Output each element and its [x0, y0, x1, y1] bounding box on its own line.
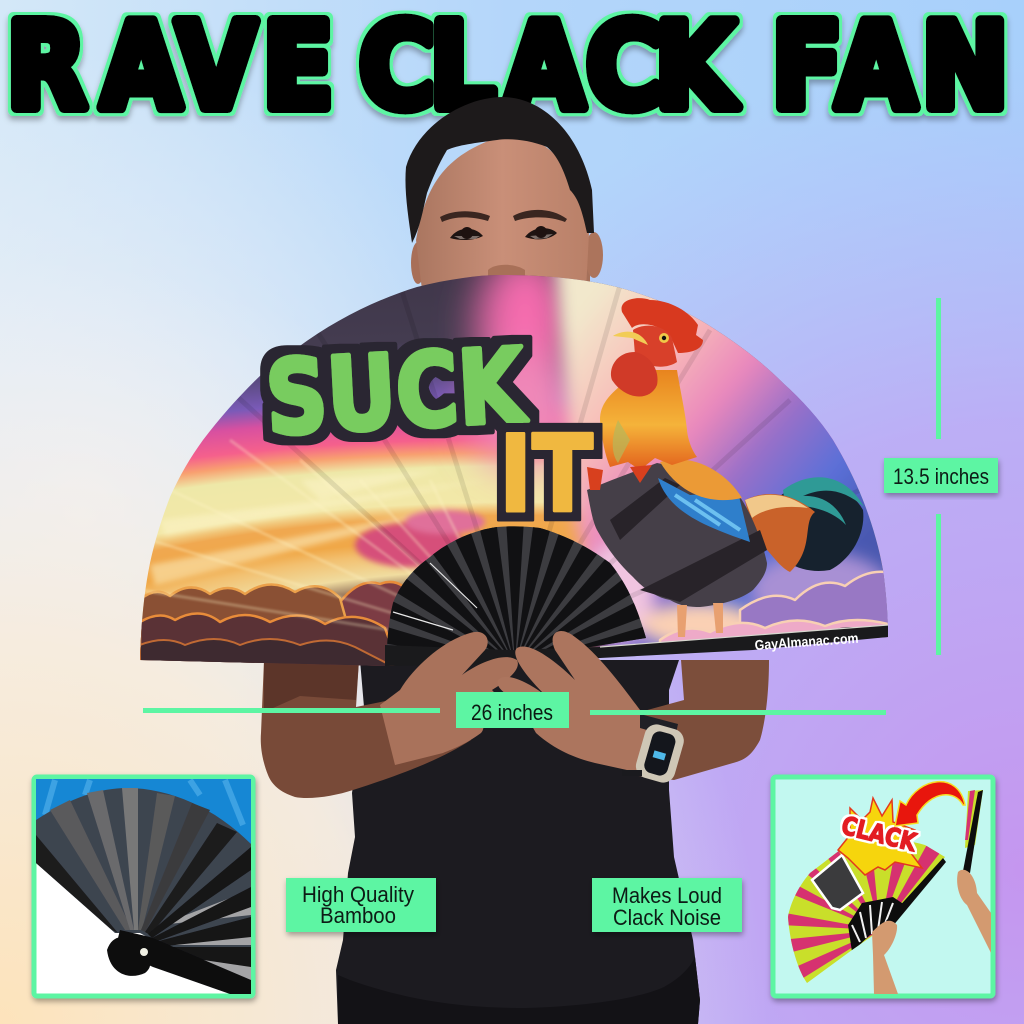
fan guard sticks: [385, 625, 888, 666]
tail dark feathers: [760, 482, 863, 571]
callout: high quality bamboo: Bamboo: [320, 903, 396, 928]
left hand: [380, 632, 518, 765]
sky tint under rooster: [585, 540, 890, 647]
callout: makes loud clack noise: Clack Noise: [613, 905, 721, 930]
height label: 13.5 inches: [893, 464, 989, 489]
head: [633, 326, 677, 367]
upper arm and hand: [957, 870, 991, 953]
face: [416, 135, 589, 290]
eye whites: [454, 234, 553, 239]
handle: [115, 930, 251, 994]
blue fabric: [36, 779, 251, 844]
red arrow: [895, 782, 965, 826]
clack word: CLACK: [839, 811, 921, 858]
bamboo: [848, 897, 905, 952]
fan website text: GayAlmanac.com: [754, 630, 859, 653]
width label: 26 inches: [471, 700, 553, 725]
striped fan: [788, 842, 945, 983]
red neck feathers: [587, 465, 652, 490]
right half sky: [544, 276, 888, 648]
hair: [405, 97, 594, 243]
body: [587, 463, 767, 607]
title: CLACK: [359, 0, 739, 136]
lower arm and hand: [872, 921, 898, 994]
smart watch: [622, 714, 687, 785]
bamboo ribs: [387, 526, 646, 650]
callout: makes loud clack noise: Makes Loud: [612, 883, 722, 908]
ears: [411, 242, 425, 284]
fan fabric print: [140, 275, 888, 666]
eyes: [450, 228, 557, 240]
width label: [456, 692, 569, 728]
hackle shadow: [613, 420, 630, 463]
person: [261, 97, 769, 1024]
hackle neck: [600, 370, 697, 470]
clouds right: [658, 570, 888, 642]
panel: clack demonstration: [773, 777, 993, 996]
bamboo ribs: [36, 788, 251, 967]
width dimension: [143, 692, 886, 728]
beak: [613, 332, 648, 345]
fan stick: [886, 858, 946, 927]
closed fan: [965, 790, 983, 848]
title: FAN: [772, 0, 1009, 136]
left arm: [261, 660, 471, 798]
rooster: [587, 298, 864, 637]
nose shadow: [488, 265, 525, 280]
fan: [140, 275, 888, 666]
SUCK: SUCK: [263, 326, 530, 459]
callout: high quality bamboo: [286, 878, 436, 932]
wing blue: [658, 478, 750, 542]
fan blade gaps: [36, 788, 251, 947]
height dimension: [884, 298, 998, 655]
wing blue streaks: [675, 495, 740, 530]
clouds left: [140, 580, 402, 666]
panel: bamboo close-up: [34, 777, 253, 996]
lower gap highlights: [172, 898, 251, 980]
hands and watch: [380, 631, 687, 785]
shirt hem and trousers: [338, 957, 700, 1024]
right arm: [630, 660, 769, 780]
wattle: [611, 352, 658, 396]
IT: IT: [499, 413, 593, 536]
left upper arm shading: [264, 660, 359, 712]
tail teal feathers: [783, 477, 864, 525]
eye: [659, 333, 669, 343]
callout: makes loud clack noise: [592, 878, 742, 932]
eyebrows: [440, 210, 567, 222]
tail orange feathers: [745, 494, 815, 572]
shirt: [336, 660, 700, 1024]
cup on fan: [812, 855, 863, 910]
legs: [677, 603, 723, 637]
wing orange: [660, 459, 742, 500]
pleat folds: [145, 438, 461, 632]
neck: [430, 250, 590, 290]
right hand: [498, 631, 650, 772]
title: RAVE: [7, 0, 334, 136]
height label: [884, 458, 998, 493]
fan slogan: [263, 326, 593, 536]
light rays: [148, 472, 454, 586]
pink clouds: [355, 510, 485, 567]
comb: [622, 298, 703, 353]
starburst: [838, 798, 922, 875]
centre pink area: [470, 250, 580, 470]
body shadow stripes: [610, 478, 767, 602]
callout: high quality bamboo: High Quality: [302, 882, 414, 907]
title: [7, 0, 1009, 136]
